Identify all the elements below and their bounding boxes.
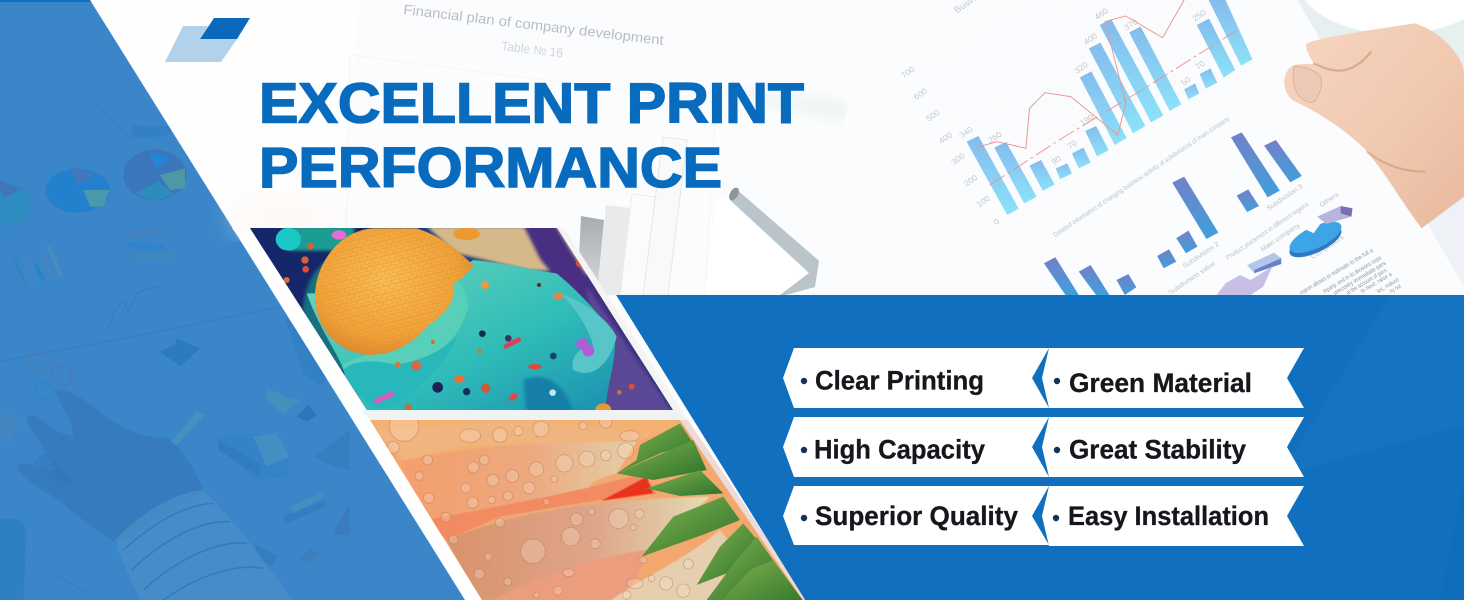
icon: woman's hand bbox=[17, 389, 203, 543]
specks bbox=[276, 228, 635, 417]
chart axis labels: 500 bbox=[924, 107, 942, 123]
teal pool bbox=[307, 260, 615, 413]
ink pools bbox=[247, 227, 673, 413]
paper: financial plan table: Table № 16 bbox=[501, 39, 564, 60]
paragraph text on paper: at the account of pers bbox=[1345, 267, 1388, 297]
paper: financial plan table bbox=[330, 0, 860, 295]
feature: High Capacity bbox=[783, 417, 1049, 477]
chart axis labels: 200 bbox=[962, 172, 980, 188]
line chart overlay bbox=[977, 0, 1184, 148]
feature: Clear Printing: Clear Printing bbox=[815, 366, 984, 396]
small chart: bars bbox=[12, 228, 175, 284]
water drops bbox=[387, 412, 693, 599]
feature list bbox=[783, 348, 1304, 546]
target circles bbox=[29, 352, 72, 399]
chart axis labels: 90 bbox=[1049, 153, 1063, 167]
image: petals with water drops bbox=[360, 410, 810, 600]
pie charts bbox=[0, 150, 187, 225]
chart axis labels: 700 bbox=[899, 64, 917, 80]
title: PERFORMANCE bbox=[259, 136, 722, 200]
panel: blue features background bbox=[616, 295, 1464, 600]
bar chart: subdivisions bbox=[1044, 132, 1302, 295]
green leaves bbox=[617, 423, 810, 600]
chart axis labels: 70 bbox=[1065, 138, 1079, 151]
chart axis labels: 320 bbox=[1072, 60, 1090, 76]
panel: left blue photo overlay bbox=[0, 0, 500, 600]
chart axis labels: 250 bbox=[1190, 7, 1208, 23]
chart axis labels: 260 bbox=[986, 129, 1004, 145]
feature: Green Material: Green Material bbox=[1069, 368, 1252, 398]
feature: High Capacity: High Capacity bbox=[814, 434, 985, 464]
feature: Clear Printing bbox=[783, 348, 1049, 408]
chart axis labels: 190 bbox=[1078, 112, 1096, 128]
small chart: line bbox=[109, 286, 164, 326]
sleeve bbox=[115, 490, 293, 600]
paper: financial plan table: Financial plan of company development bbox=[403, 1, 665, 48]
chart axis labels: 100 bbox=[974, 193, 992, 209]
icon: metal clip and card bbox=[705, 186, 905, 303]
paragraph text on paper: les, reduce bbox=[1376, 276, 1401, 295]
chart axis labels: 300 bbox=[949, 151, 967, 167]
paper: business charts: Subdivision 3 bbox=[1266, 183, 1305, 212]
feature: Great Stability: Great Stability bbox=[1069, 434, 1246, 464]
panel: white frame around photos bbox=[232, 205, 808, 600]
chart caption: Detailed information of changing business activity of subdivisions of main company bbox=[1052, 116, 1232, 239]
icon: hand holding paper bbox=[1284, 23, 1464, 228]
chart axis labels: 50 bbox=[1179, 74, 1193, 88]
chart axis labels: 370 bbox=[1122, 16, 1140, 32]
background cup and table tint bbox=[1290, 0, 1464, 295]
icon: metal clip and card: main mar bbox=[833, 270, 890, 303]
paper: business charts: Subdivision value bbox=[1167, 261, 1217, 297]
paragraph text on paper: report allows to estimate to the full a bbox=[1298, 247, 1375, 297]
title bbox=[259, 72, 804, 200]
paragraph text on paper: precisely immediate pers bbox=[1332, 260, 1388, 297]
paper: business charts bbox=[814, 0, 1464, 297]
chart axis labels bbox=[899, 0, 1208, 227]
paper: business charts: Product placement in different regions bbox=[1225, 201, 1311, 262]
paper: business charts: Subdivision 2 bbox=[1182, 241, 1221, 270]
image: colourful ink art bbox=[250, 228, 673, 410]
title: EXCELLENT PRINT bbox=[259, 72, 804, 136]
chart axis labels: 70 bbox=[1193, 58, 1207, 72]
paper: business charts: Competitors bbox=[1310, 234, 1346, 261]
feature: Great Stability bbox=[1042, 417, 1304, 477]
chart axis labels: 400 bbox=[936, 130, 955, 146]
feature: Superior Quality: Superior Quality bbox=[815, 501, 1018, 531]
icon: double parallelogram logo bbox=[165, 18, 250, 62]
bar chart: monthly values bbox=[967, 0, 1253, 215]
paragraph text on paper: mpany, and in its divisions sepa bbox=[1322, 255, 1383, 295]
stacked bars bbox=[0, 409, 20, 442]
feature: Easy Installation: Easy Installation bbox=[1068, 501, 1269, 531]
feature: Green Material bbox=[1042, 348, 1304, 408]
chart axis labels: 0 bbox=[992, 216, 1002, 227]
paragraph text on paper: to next: raise a bbox=[1359, 271, 1394, 295]
petals bbox=[367, 420, 737, 600]
paragraph text on paper: ny out bbox=[1388, 283, 1403, 295]
chart axis labels: 460 bbox=[1092, 6, 1110, 22]
arrows and stepped charts bbox=[159, 338, 350, 565]
feature: Easy Installation bbox=[1042, 486, 1304, 546]
paper: business charts: Main company bbox=[1260, 222, 1302, 253]
chart axis labels: 400 bbox=[1081, 31, 1099, 47]
feature: Superior Quality bbox=[783, 486, 1049, 545]
pie chart: competitors bbox=[1285, 206, 1353, 264]
chart axis labels: 600 bbox=[911, 86, 929, 102]
orange mound bbox=[315, 228, 473, 355]
pie chart: main company bbox=[1217, 253, 1281, 295]
document sheets bbox=[169, 126, 327, 379]
chart axis labels: 340 bbox=[957, 124, 975, 140]
paper: business charts: Others bbox=[1319, 191, 1341, 209]
device corner bbox=[0, 518, 26, 600]
